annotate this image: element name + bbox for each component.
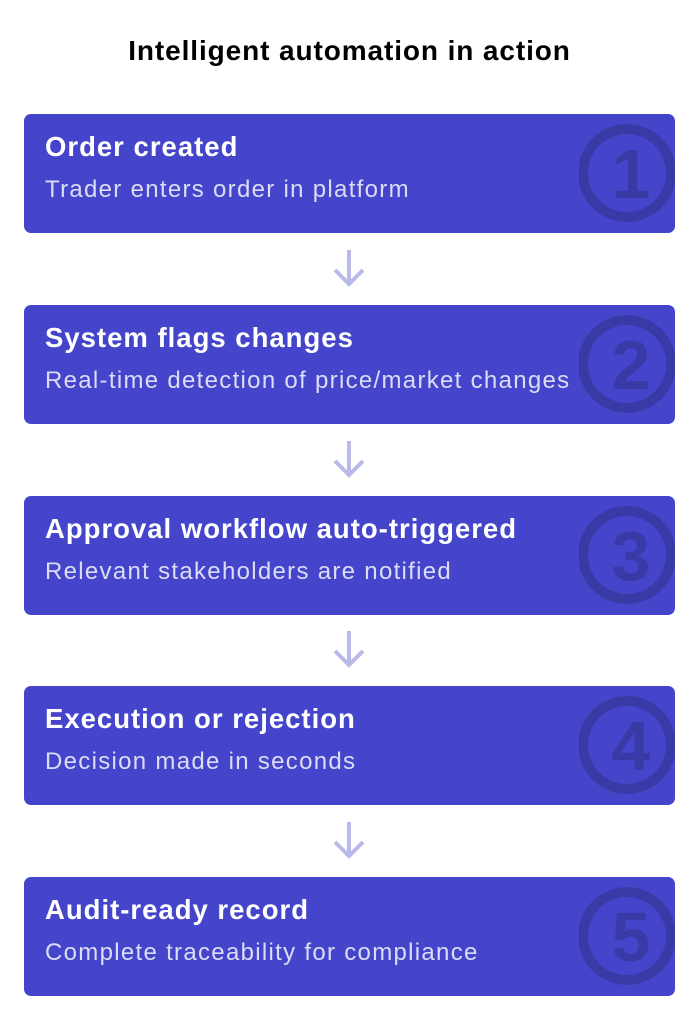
card 2: [24, 305, 675, 424]
icon: number 5: 5: [612, 898, 650, 976]
arrow: [334, 441, 364, 478]
card 5: [24, 877, 675, 996]
arrow: [334, 822, 364, 859]
icon: number 4: [579, 696, 675, 794]
text: Relevant stakeholders are notified: [45, 558, 452, 585]
icon: number 2: 2: [612, 326, 650, 404]
text: Complete traceability for compliance: [45, 939, 479, 966]
card 1: [24, 114, 675, 233]
icon: number 3: 3: [612, 517, 650, 595]
heading: Audit-ready record: [45, 894, 309, 925]
icon: number 4: 4: [612, 707, 651, 785]
heading: Approval workflow auto-triggered: [45, 513, 517, 544]
text: Real-time detection of price/market changes: [45, 367, 570, 394]
text: Trader enters order in platform: [45, 176, 410, 203]
card 3: [24, 496, 675, 615]
card 4: [24, 686, 675, 805]
icon: number 5: [579, 887, 675, 985]
heading: Execution or rejection: [45, 703, 356, 734]
icon: number 2: [579, 315, 675, 413]
title: Intelligent automation in action: [128, 35, 571, 66]
icon: number 3: [579, 506, 675, 604]
heading: System flags changes: [45, 322, 354, 353]
icon: number 1: 1: [612, 135, 650, 213]
icon: number 1: [579, 124, 675, 222]
text: Decision made in seconds: [45, 748, 356, 775]
arrow: [334, 631, 364, 668]
heading: Order created: [45, 131, 238, 162]
arrow: [334, 250, 364, 287]
